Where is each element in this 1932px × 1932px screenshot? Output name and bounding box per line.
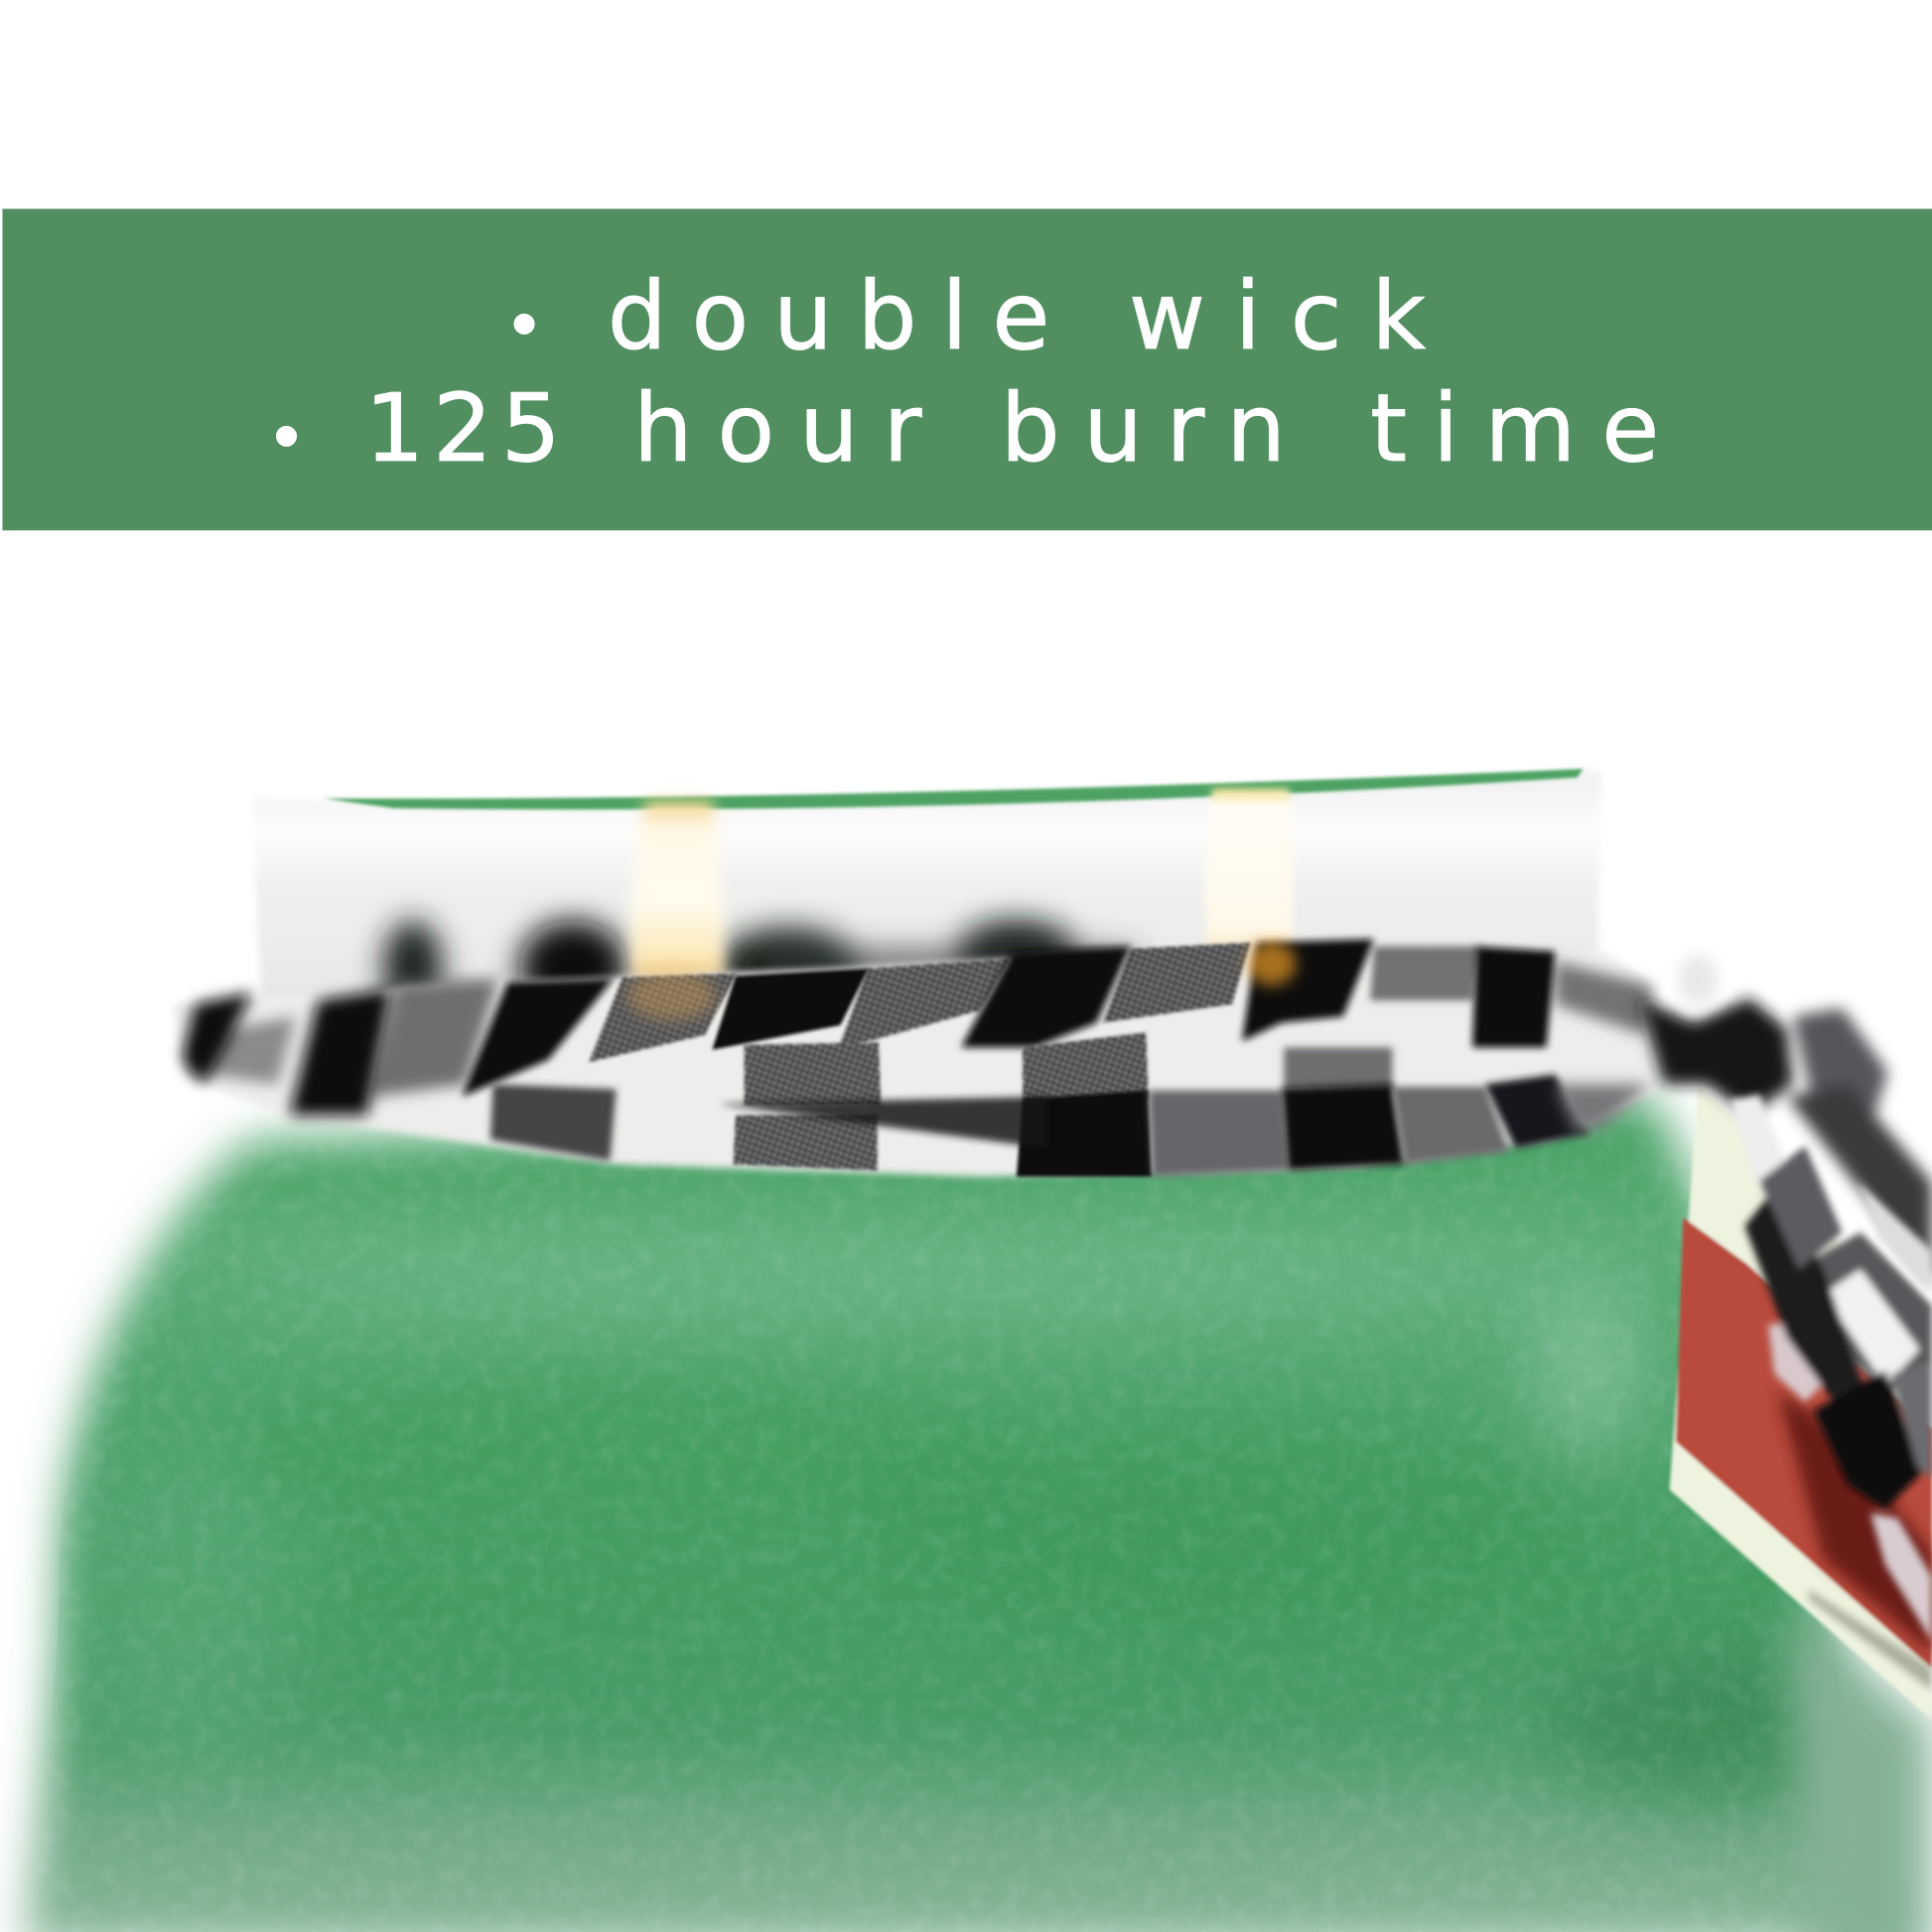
wax seen through jar rim (323, 768, 1584, 809)
banner line: double wick: double (608, 262, 1074, 371)
right wick flame (1204, 788, 1294, 961)
banner line: double wick: wick (1129, 262, 1455, 371)
tag small print (1809, 1589, 1932, 1691)
candle wax body (0, 1097, 1932, 1932)
banner line: 125 hour burn time: 125 (364, 374, 569, 483)
tail grey checks (1759, 1146, 1842, 1269)
gingham ribbon around neck (173, 939, 1657, 1176)
pale fade at bottom right (1787, 1601, 1932, 1932)
knot (1639, 998, 1793, 1115)
tail grey band (1774, 1232, 1932, 1392)
ribbon upper row black checks (183, 939, 1555, 1115)
banner line: 125 hour burn time: hour (633, 374, 946, 483)
ribbon base (173, 946, 1657, 1176)
dark red ribbon shadow on tag (1778, 1392, 1932, 1654)
banner line: 125 hour burn time: time (1370, 374, 1685, 483)
ribbon fold shadow wedge (719, 1097, 1047, 1149)
tail grey flap (1793, 1008, 1887, 1121)
ribbon middle row checks (745, 1033, 1392, 1105)
ribbon lower row checks (490, 1074, 1651, 1176)
left wick flame (631, 801, 724, 980)
info banner (2, 208, 1932, 530)
tail black checks (1744, 1189, 1863, 1405)
tag red panel (1676, 1217, 1932, 1668)
tail white checks (1824, 1269, 1920, 1386)
flame glow on ribbon (627, 971, 716, 1021)
tail upper strip (1787, 1084, 1932, 1282)
dark ribbon shadows in glass (383, 920, 1134, 1014)
banner line: double wick: • (511, 282, 537, 364)
banner line: 125 hour burn time: • (274, 394, 300, 477)
ribbon upper row grey checks (191, 942, 1651, 1097)
banner line: 125 hour burn time: burn (1001, 374, 1310, 483)
glass jar neck (252, 768, 1601, 1004)
hang tag (1670, 1087, 1932, 1721)
ribbon knot and tails (1639, 955, 1932, 1654)
